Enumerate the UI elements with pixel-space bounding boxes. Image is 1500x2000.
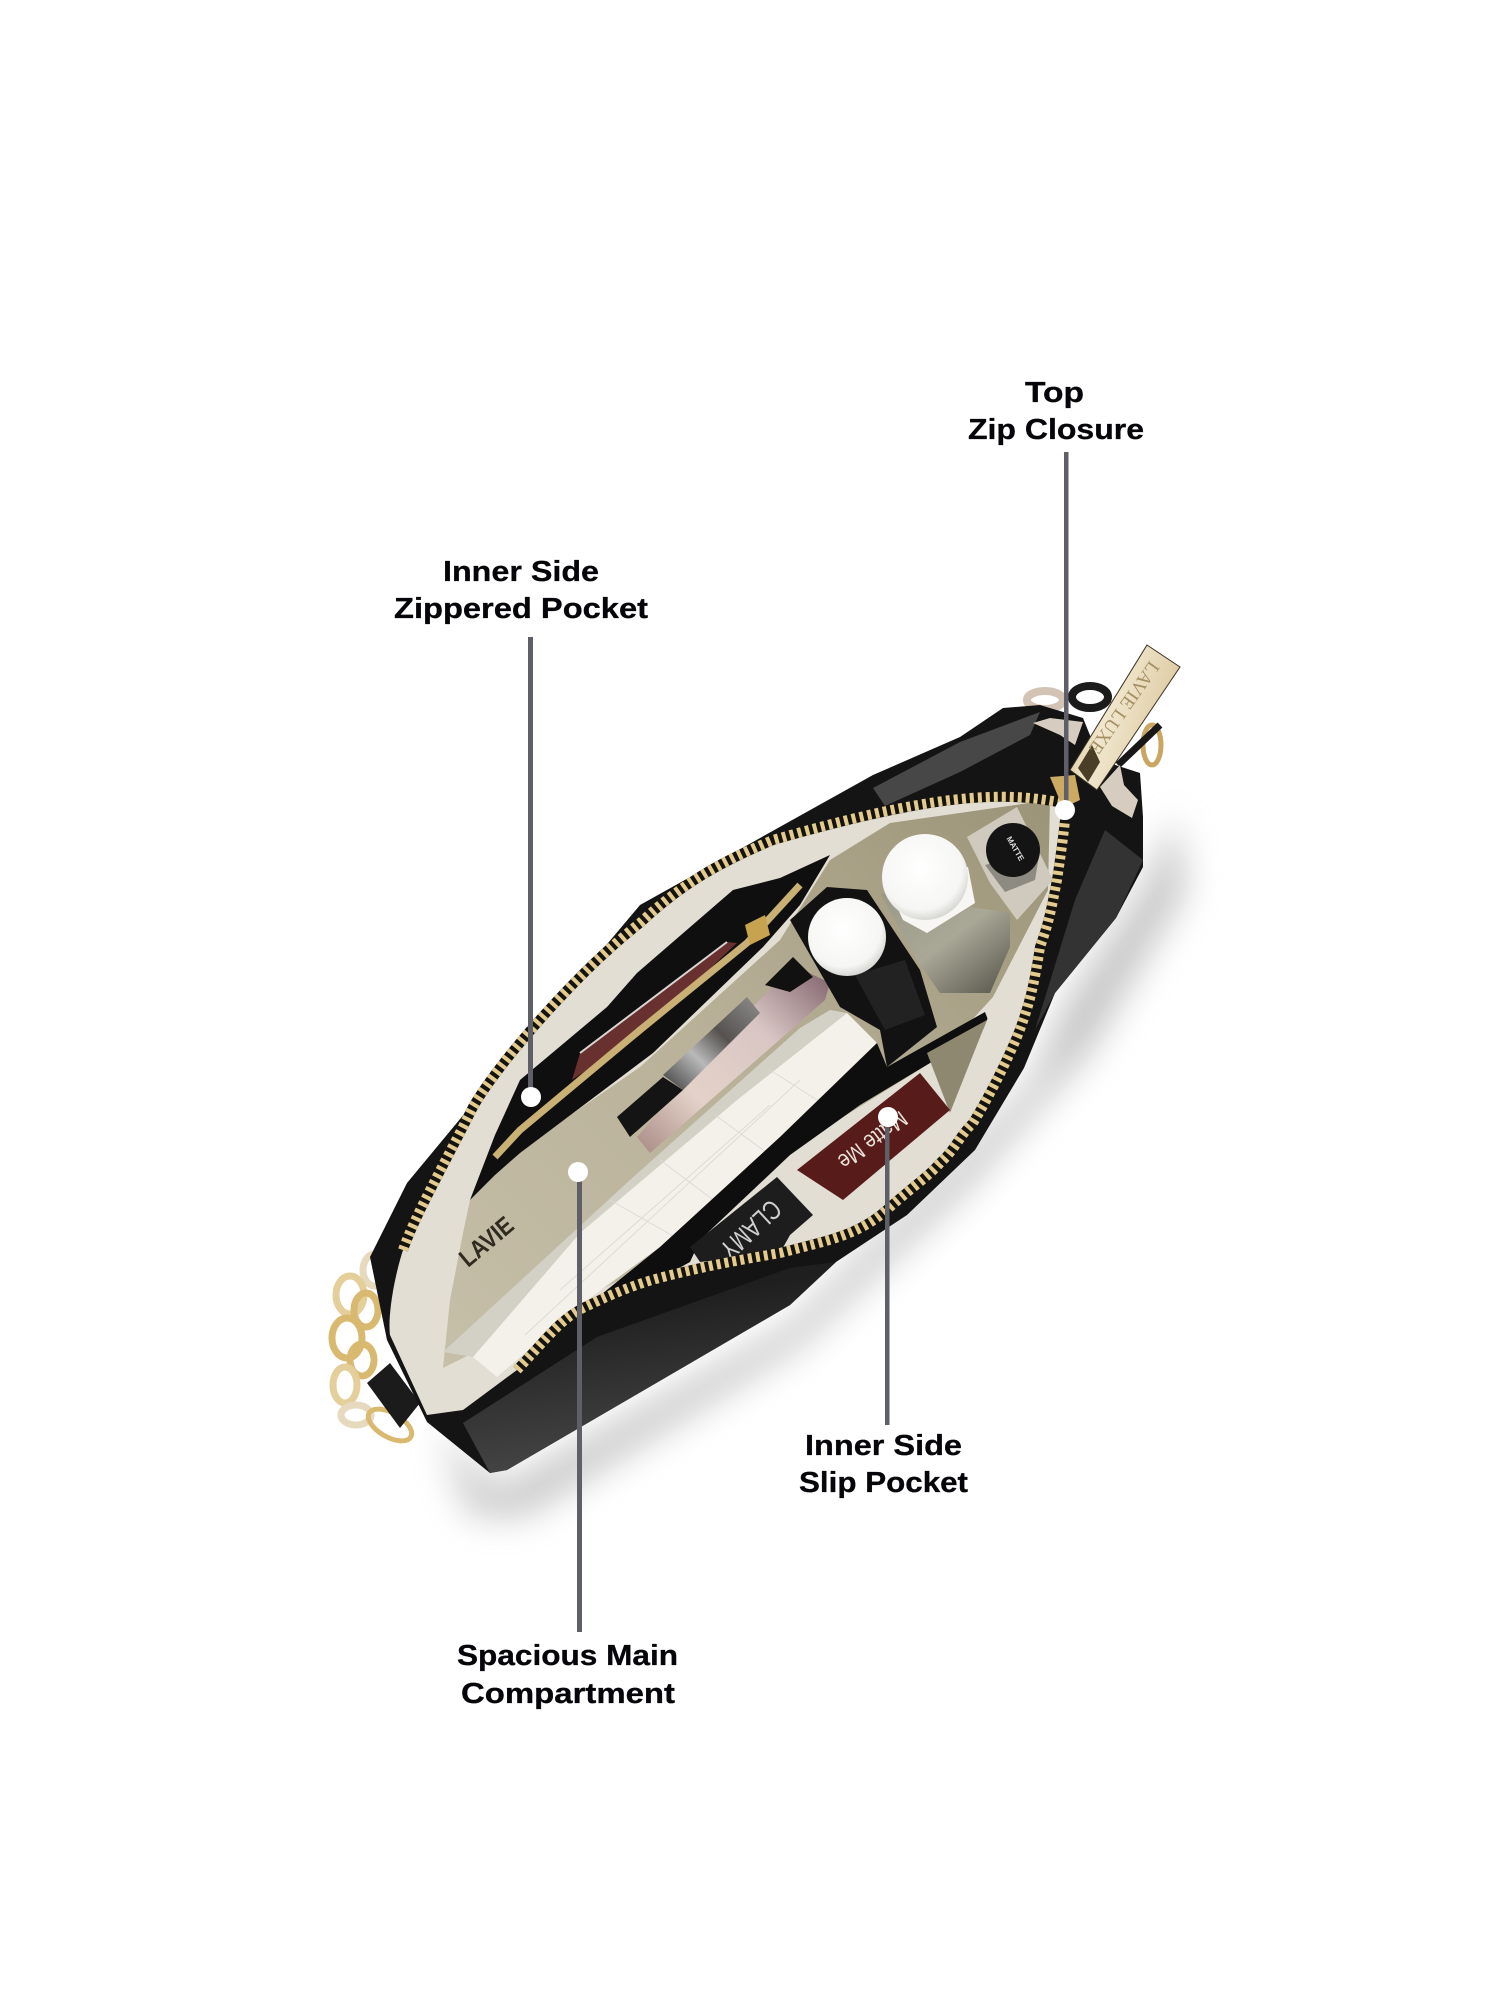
CLAMY text: CLAMY — [714, 1194, 787, 1265]
tag lettering: LAVIE LUXE — [1084, 657, 1163, 758]
CLAMY box — [690, 1177, 813, 1262]
jar lid — [986, 823, 1040, 877]
pocket zipper pull — [745, 915, 770, 945]
lower zipper — [517, 820, 1065, 1370]
notebook grid — [525, 1070, 825, 1335]
leader line — [577, 1172, 582, 1632]
bag outer body — [370, 705, 1143, 1473]
zipper slider — [1050, 775, 1080, 808]
notebook pages — [473, 1013, 877, 1377]
product text: Matte Me — [833, 1106, 913, 1175]
chain strap lower left — [332, 1254, 417, 1447]
callout: spacious main compartment — [457, 1162, 678, 1710]
bottle cap — [882, 834, 968, 920]
callout: top zip closure — [968, 377, 1144, 820]
lower leather panel — [463, 1262, 836, 1473]
chain strap upper right — [1027, 686, 1161, 765]
clear bottle — [880, 834, 1010, 993]
strap tab — [367, 1363, 420, 1428]
small jar — [967, 807, 1053, 920]
upper zipper — [403, 797, 1063, 1250]
label: inner side slip pocket: Inner Side — [805, 1430, 962, 1462]
black tube bottle — [790, 887, 937, 1067]
marker dot — [878, 1107, 898, 1127]
label: top zip closure: Zip Closure — [968, 414, 1144, 446]
right leather panel — [1035, 830, 1143, 1030]
tag slot — [1078, 745, 1100, 782]
leader line — [885, 1117, 890, 1425]
label: inner side zippered pocket: Zippered Pocket — [394, 593, 648, 625]
bag interior lining — [390, 797, 1065, 1415]
slip pocket box red — [797, 1073, 950, 1200]
label: inner side zippered pocket: Inner Side — [443, 556, 599, 588]
compact dark corner — [765, 957, 813, 992]
leader line — [1064, 452, 1068, 808]
black slip pocket band — [597, 1012, 990, 1298]
clear sleeve — [443, 1010, 847, 1357]
bottle white collar — [883, 867, 975, 933]
bag illustration — [332, 645, 1185, 1515]
zipper pull tag — [1070, 645, 1180, 790]
tube shading — [855, 960, 925, 1030]
notebook — [473, 1013, 877, 1377]
marker dot — [1055, 800, 1075, 820]
slip pocket lining right — [890, 897, 1047, 1207]
ruffled lining left of zip — [1033, 718, 1083, 745]
ruffled lining right of zip — [1100, 765, 1138, 818]
label: spacious main compartment: Spacious Main — [457, 1640, 678, 1672]
jar label: MATTE — [1005, 835, 1026, 863]
pocket card — [572, 942, 737, 1080]
back wall black edge — [470, 855, 830, 1200]
leader line — [528, 637, 533, 1097]
marker dot — [568, 1162, 588, 1182]
card white edge — [580, 942, 727, 1053]
pocket zipper — [495, 885, 800, 1157]
lining logo mark — [1000, 995, 1035, 1050]
bag shadow — [440, 815, 1185, 1515]
interior floor — [443, 800, 1050, 1368]
marker dot — [521, 1087, 541, 1107]
callout: inner side zippered pocket — [394, 556, 648, 1107]
compact case — [637, 965, 830, 1153]
slip pocket tan wall — [927, 1020, 987, 1113]
label: inner side slip pocket: Slip Pocket — [799, 1467, 968, 1499]
jar base — [985, 850, 1040, 892]
compact silver band — [663, 997, 760, 1090]
callout: inner side slip pocket — [799, 1107, 968, 1499]
top leather panel — [873, 712, 1040, 806]
label: spacious main compartment: Compartment — [461, 1678, 675, 1710]
compact black end — [617, 1077, 683, 1137]
label: top zip closure: Top — [1025, 377, 1084, 409]
tube cap — [808, 898, 886, 976]
lining logo text: LAVIE — [454, 1211, 519, 1273]
